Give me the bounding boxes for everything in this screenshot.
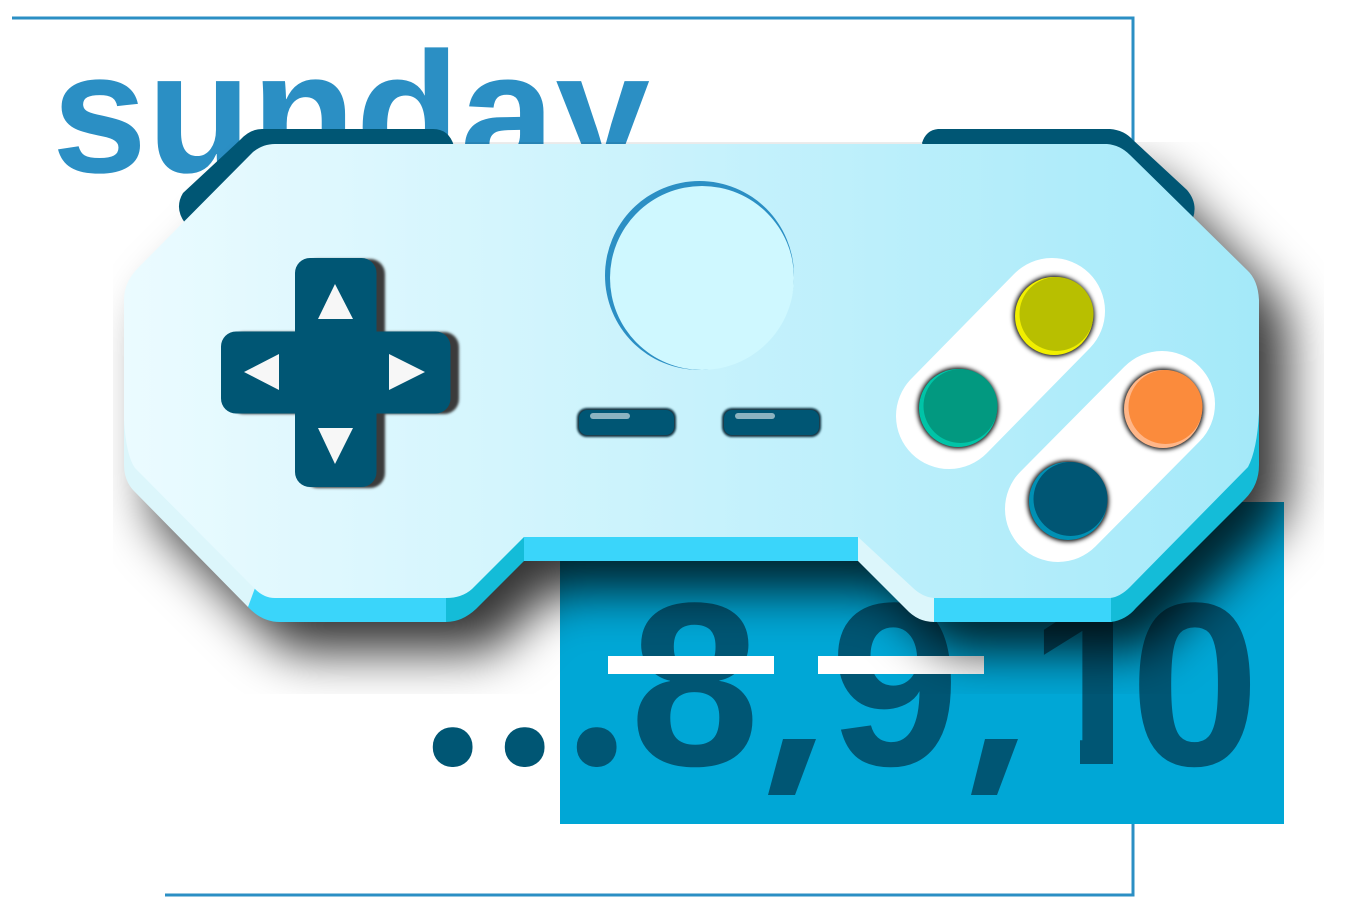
numbers: 8,9,10: [637, 602, 1250, 795]
numbers: 8,9,10: ,: [926, 330, 1078, 910]
centre joystick: [605, 181, 794, 370]
white button pill lower: [1058, 404, 1162, 509]
controller: [124, 129, 1287, 652]
panel: blue number block: [560, 502, 1284, 824]
arrow left: [244, 354, 279, 390]
button: teal: [918, 368, 998, 448]
notch right wall: [858, 530, 936, 622]
select button: [577, 408, 676, 437]
right wall: [1100, 400, 1259, 622]
bottom left wall: [248, 588, 446, 622]
bottom right wall: [934, 590, 1112, 622]
white button pill upper: [949, 311, 1052, 416]
controller top face: [124, 144, 1259, 598]
bottom left corner wall: [446, 530, 524, 622]
title: sunday: sunday: [52, 17, 650, 209]
notch wall: [524, 530, 858, 561]
start button: [722, 408, 821, 437]
numbers: 8,9,10: 9: [830, 555, 960, 815]
d-pad: [221, 258, 459, 488]
arrow down: [318, 428, 353, 464]
button: orange: [1122, 368, 1204, 450]
arrow right: [389, 354, 425, 390]
button: yellow: [1014, 276, 1094, 356]
numbers: 8,9,10: 1: [1028, 554, 1158, 814]
right shoulder bumper: [922, 129, 1195, 218]
button: navy: [1028, 460, 1108, 542]
controller drop shadow: [152, 174, 1287, 652]
arrow up: [318, 284, 353, 319]
d-pad shadow: [229, 259, 459, 488]
left chamfer wall: [124, 300, 270, 607]
numbers: 8,9,10: 0: [1130, 555, 1260, 815]
numbers: 8,9,10: ,: [724, 330, 876, 910]
white bar right: [818, 656, 984, 674]
page frame line: [12, 18, 1133, 895]
white bar left: [608, 656, 774, 674]
leading dots: ...: [451, 737, 598, 751]
d-pad cross: [221, 258, 450, 487]
controller side wall: [124, 300, 1259, 622]
left shoulder bumper: [179, 129, 454, 232]
numbers: 8,9,10: 8: [630, 555, 760, 815]
